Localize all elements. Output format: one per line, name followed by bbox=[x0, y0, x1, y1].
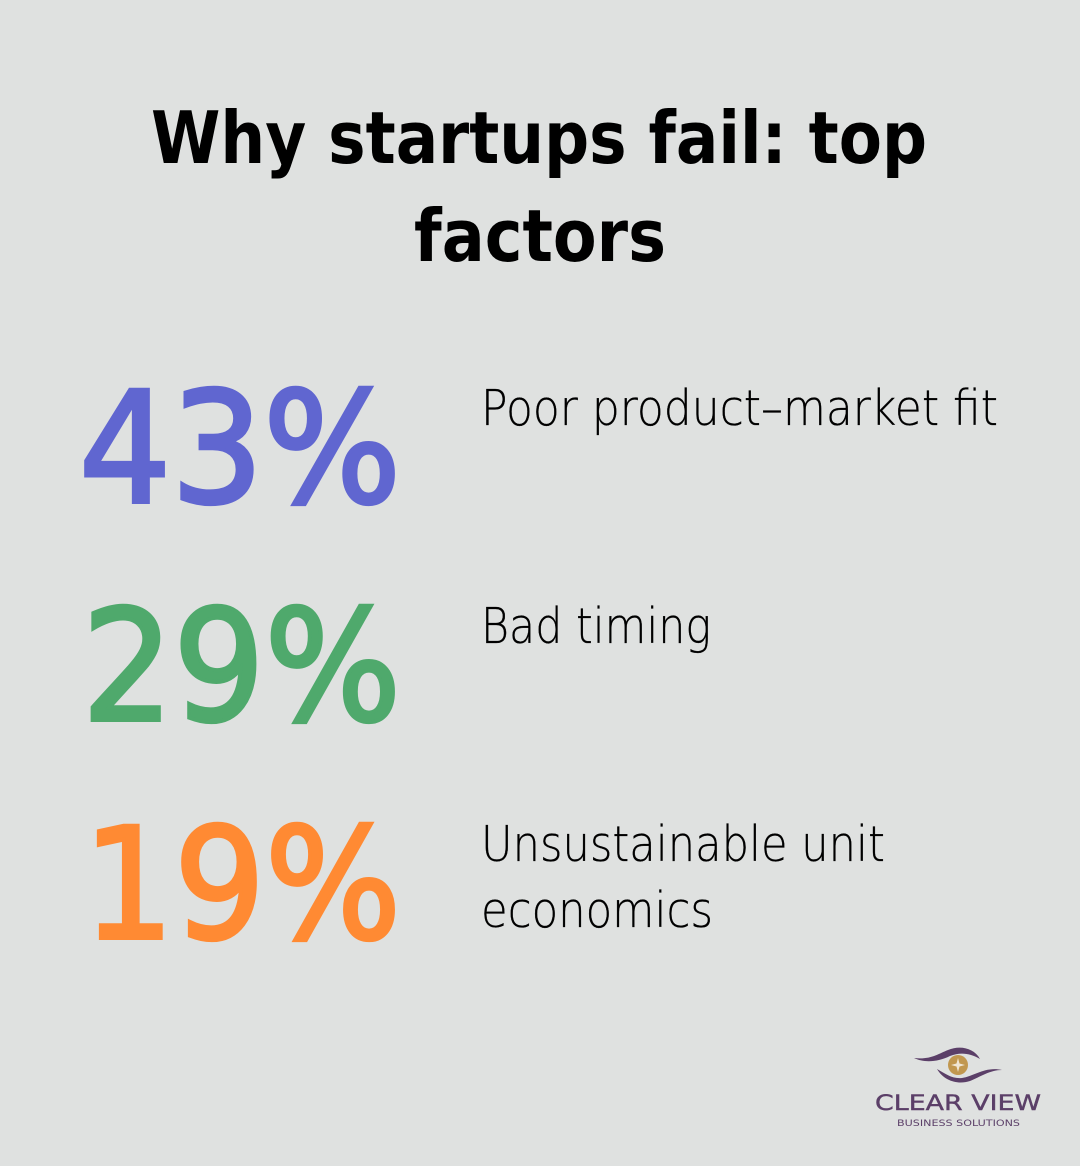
icon: eye with star bbox=[914, 1048, 1002, 1082]
title bbox=[151, 96, 927, 278]
logo wordmark: CLEAR VIEW bbox=[875, 1091, 1041, 1115]
title: factors bbox=[414, 194, 666, 278]
stat: 19% unsustainable unit economics bbox=[83, 796, 885, 975]
stat: 43% poor product-market fit bbox=[79, 360, 998, 539]
logo: Clear View Business Solutions bbox=[875, 1048, 1041, 1129]
stat: 19% unsustainable unit economics: 19% bbox=[83, 796, 401, 975]
stat: 29% bad timing bbox=[82, 578, 711, 757]
logo tagline: BUSINESS SOLUTIONS bbox=[897, 1119, 1020, 1129]
stat: 29% bad timing: Bad timing bbox=[481, 598, 711, 655]
title: Why startups fail: top bbox=[151, 96, 927, 180]
stat: 19% unsustainable unit economics: Unsustainable unit bbox=[481, 816, 885, 873]
stat: 19% unsustainable unit economics: economics bbox=[481, 882, 713, 939]
stat: 29% bad timing: 29% bbox=[82, 578, 401, 757]
stat: 43% poor product-market fit: Poor product–market fit bbox=[481, 380, 998, 437]
stat: 43% poor product-market fit: 43% bbox=[79, 360, 401, 539]
